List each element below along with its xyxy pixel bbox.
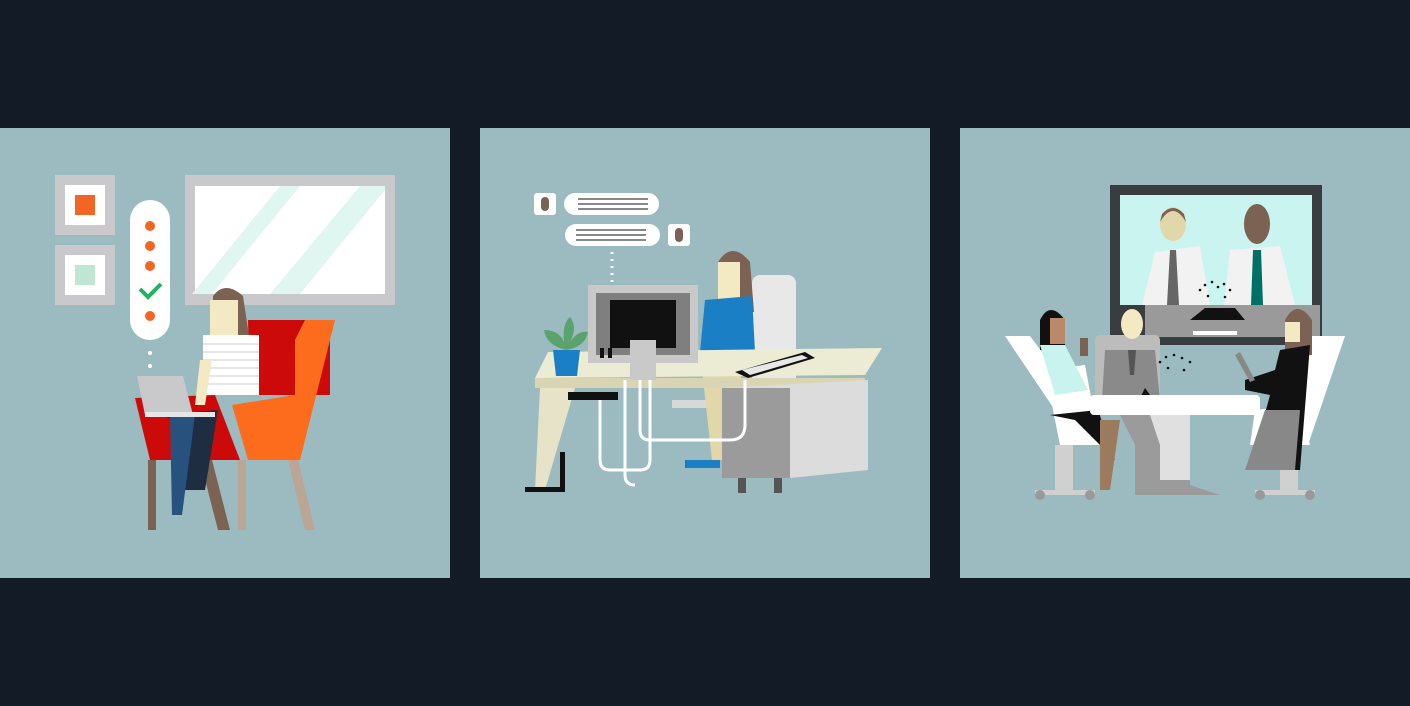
right chair with woman [1235,309,1345,500]
woman at desk [685,251,755,468]
conference table [1090,354,1260,495]
woman with laptop [137,288,259,515]
desk [525,348,882,493]
armchair [135,320,335,530]
office chair [672,275,796,408]
plant [544,317,588,376]
video screen [1110,185,1322,345]
panel: desk worker [480,128,930,578]
computer monitor [588,285,698,380]
icon: green picture frame [55,245,115,305]
panel: remote worker in armchair [0,128,450,578]
panel: video conference [960,128,1410,578]
speech bubble checklist [130,200,170,368]
center man [1095,309,1160,408]
window [185,175,395,305]
left chair with woman [1005,310,1120,500]
icon: orange picture frame [55,175,115,235]
chat bubbles [534,193,690,282]
